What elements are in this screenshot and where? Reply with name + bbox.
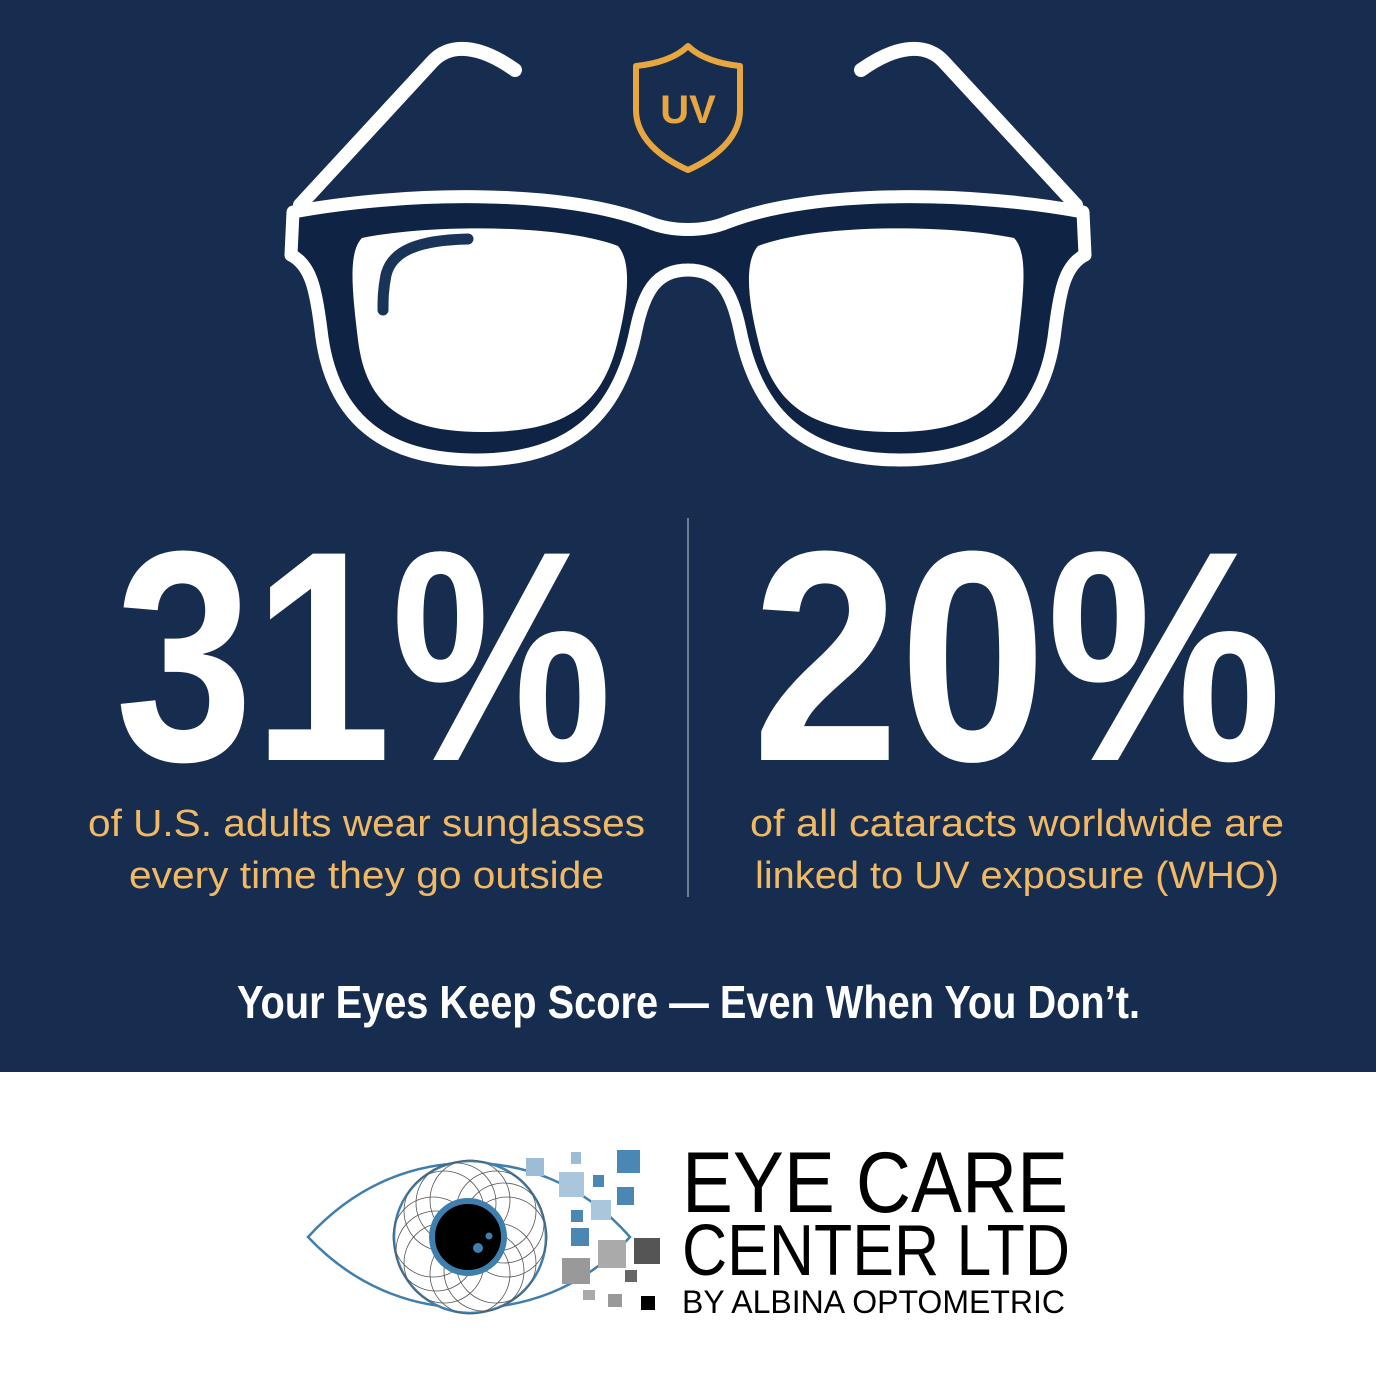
lens left — [352, 228, 627, 432]
caption right — [750, 803, 1284, 897]
stat right: 20%: 20% — [752, 488, 1282, 824]
icon: UV shield — [636, 46, 740, 170]
temples — [300, 49, 1076, 205]
logo — [308, 1135, 1070, 1320]
caption right: linked to UV exposure (WHO) — [755, 855, 1279, 897]
lens right — [749, 228, 1024, 432]
pixel squares — [526, 1150, 660, 1310]
icon: glasses — [291, 49, 1085, 460]
lens highlight — [383, 239, 468, 310]
caption right: of all cataracts worldwide are — [750, 803, 1284, 845]
logo text — [682, 1135, 1070, 1320]
stat left: 31%: 31% — [115, 488, 612, 824]
divider — [687, 518, 689, 897]
logo text: BY ALBINA OPTOMETRIC — [682, 1284, 1065, 1320]
panel: navy background — [0, 0, 1376, 1072]
caption left: of U.S. adults wear sunglasses — [88, 803, 645, 845]
frame — [291, 197, 1085, 460]
logo text: CENTER LTD — [682, 1211, 1070, 1291]
caption left: every time they go outside — [129, 855, 604, 897]
icon: eye — [308, 1160, 630, 1314]
tagline: Your Eyes Keep Score — Even When You Don’t. — [237, 976, 1140, 1028]
caption left — [88, 803, 645, 897]
logo text: EYE CARE — [682, 1135, 1068, 1231]
icon: UV shield: UV — [660, 88, 716, 132]
